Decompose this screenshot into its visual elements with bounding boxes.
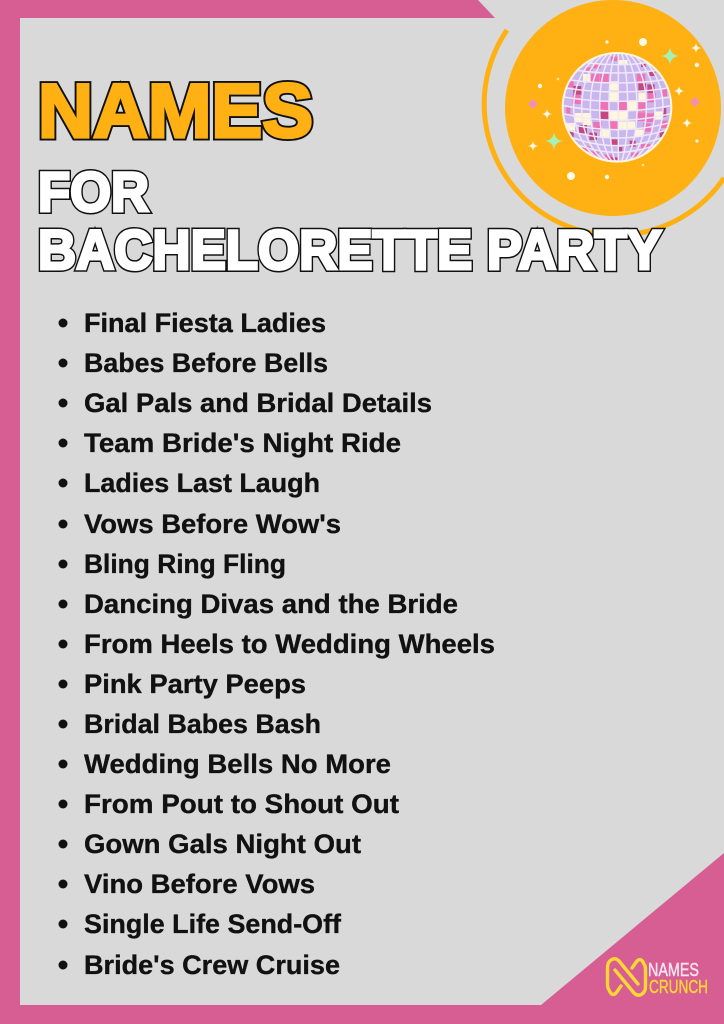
icon: disco ball bbox=[562, 50, 672, 165]
title: NAMES: NAMES bbox=[38, 69, 313, 154]
item: Bling Ring Fling: Bling Ring Fling bbox=[84, 549, 286, 579]
sparkles around the disco ball bbox=[528, 38, 701, 180]
item: Vows Before Wow's: Vows Before Wow's bbox=[84, 509, 341, 539]
list of party names bbox=[58, 308, 495, 980]
wordmark bbox=[648, 960, 708, 997]
title: BACHELORETTE PARTY: BACHELORETTE PARTY bbox=[38, 218, 662, 281]
logo: Names Crunch bbox=[608, 959, 708, 997]
item: Final Fiesta Ladies: Final Fiesta Ladies bbox=[84, 308, 326, 338]
item: Team Bride's Night Ride: Team Bride's Night Ride bbox=[84, 428, 401, 458]
item: Dancing Divas and the Bride: Dancing Divas and the Bride bbox=[84, 589, 458, 619]
item: From Pout to Shout Out: From Pout to Shout Out bbox=[84, 789, 399, 819]
item: Gown Gals Night Out: Gown Gals Night Out bbox=[84, 829, 361, 859]
icon: looped N mark bbox=[608, 959, 646, 995]
item: Single Life Send-Off: Single Life Send-Off bbox=[84, 909, 342, 939]
item: Bridal Babes Bash: Bridal Babes Bash bbox=[84, 709, 321, 739]
item: Babes Before Bells: Babes Before Bells bbox=[84, 348, 328, 378]
item: Vino Before Vows: Vino Before Vows bbox=[84, 869, 315, 899]
item: Gal Pals and Bridal Details: Gal Pals and Bridal Details bbox=[84, 388, 432, 418]
title: BACHELORETTE PARTY: BACHELORETTE PARTY bbox=[38, 218, 662, 281]
item: Bride's Crew Cruise: Bride's Crew Cruise bbox=[84, 950, 340, 980]
orange arc ring bbox=[484, 30, 724, 235]
item: Ladies Last Laugh: Ladies Last Laugh bbox=[84, 468, 320, 498]
wordmark: NAMES bbox=[648, 960, 699, 980]
orange circle bbox=[505, 0, 721, 216]
item: From Heels to Wedding Wheels: From Heels to Wedding Wheels bbox=[84, 629, 495, 659]
item: Wedding Bells No More: Wedding Bells No More bbox=[84, 749, 391, 779]
title: FOR: FOR bbox=[38, 160, 149, 223]
title: NAMES: NAMES bbox=[38, 69, 313, 154]
item: Pink Party Peeps: Pink Party Peeps bbox=[84, 669, 306, 699]
title: FOR: FOR bbox=[38, 160, 149, 223]
